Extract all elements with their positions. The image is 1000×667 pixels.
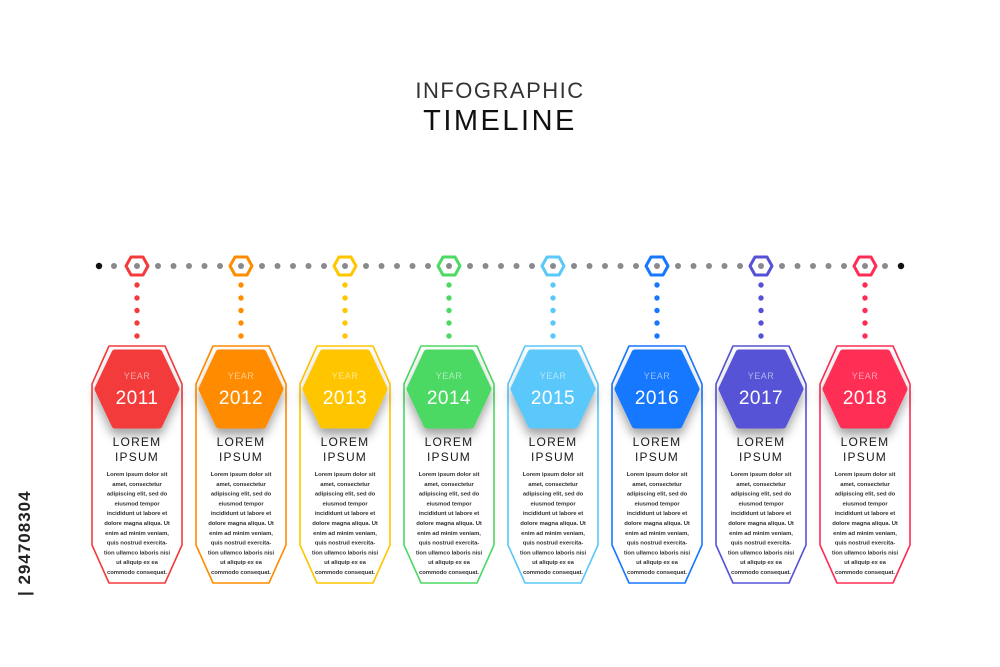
connector 2017 bbox=[758, 282, 764, 339]
title: INFOGRAPHIC bbox=[415, 78, 585, 103]
marker 2011 bbox=[126, 257, 148, 275]
timeline dotted line bbox=[96, 263, 904, 269]
card 2011 bbox=[92, 346, 182, 583]
card 2017: YEAR bbox=[748, 371, 774, 381]
card 2017: 2017 bbox=[739, 388, 783, 409]
card 2014 bbox=[404, 346, 494, 583]
card 2016: 2016 bbox=[635, 388, 679, 409]
card 2018: YEAR bbox=[852, 371, 878, 381]
connector 2016 bbox=[654, 282, 660, 339]
card 2012: 2012 bbox=[219, 388, 263, 409]
column 2015 bbox=[508, 257, 598, 583]
column 2011 bbox=[92, 257, 182, 583]
card 2016 bbox=[612, 346, 702, 583]
column 2017 bbox=[716, 257, 806, 583]
marker 2016 bbox=[646, 257, 668, 275]
side stock id text: | 294708304 bbox=[15, 490, 34, 596]
card 2015: IPSUM bbox=[531, 450, 575, 464]
card 2013: YEAR bbox=[332, 371, 358, 381]
card 2018: LOREM bbox=[841, 435, 889, 449]
connector 2013 bbox=[342, 282, 348, 339]
title bbox=[415, 78, 585, 137]
connector 2015 bbox=[550, 282, 556, 339]
card 2016: LOREM bbox=[633, 435, 681, 449]
card 2014: IPSUM bbox=[427, 450, 471, 464]
card 2017: LOREM bbox=[737, 435, 785, 449]
card 2018: IPSUM bbox=[843, 450, 887, 464]
marker 2017 bbox=[750, 257, 772, 275]
card 2018 bbox=[820, 346, 910, 583]
column 2016 bbox=[612, 257, 702, 583]
connector 2012 bbox=[238, 282, 244, 339]
card 2014: 2014 bbox=[427, 388, 471, 409]
marker 2014 bbox=[438, 257, 460, 275]
card 2015: LOREM bbox=[529, 435, 577, 449]
marker 2013 bbox=[334, 257, 356, 275]
connector 2018 bbox=[862, 282, 868, 339]
card 2015 bbox=[508, 346, 598, 583]
card 2014: YEAR bbox=[436, 371, 462, 381]
card 2013: 2013 bbox=[323, 388, 367, 409]
column 2012 bbox=[196, 257, 286, 583]
card 2012 bbox=[196, 346, 286, 583]
card 2012: LOREM bbox=[217, 435, 265, 449]
connector 2014 bbox=[446, 282, 452, 339]
column 2013 bbox=[300, 257, 390, 583]
card 2011: 2011 bbox=[116, 388, 158, 409]
card 2011: YEAR bbox=[124, 371, 150, 381]
card 2012: IPSUM bbox=[219, 450, 263, 464]
card 2013: IPSUM bbox=[323, 450, 367, 464]
card 2018: 2018 bbox=[843, 388, 887, 409]
card 2015: YEAR bbox=[540, 371, 566, 381]
marker 2018 bbox=[854, 257, 876, 275]
card 2014: LOREM bbox=[425, 435, 473, 449]
column 2014 bbox=[404, 257, 494, 583]
card 2016: IPSUM bbox=[635, 450, 679, 464]
card 2016: YEAR bbox=[644, 371, 670, 381]
marker 2012 bbox=[230, 257, 252, 275]
marker 2015 bbox=[542, 257, 564, 275]
card 2017 bbox=[716, 346, 806, 583]
card 2011: IPSUM bbox=[115, 450, 159, 464]
card 2012: YEAR bbox=[228, 371, 254, 381]
card 2011: LOREM bbox=[113, 435, 161, 449]
column 2018 bbox=[820, 257, 910, 583]
connector 2011 bbox=[134, 282, 140, 339]
title: TIMELINE bbox=[423, 105, 577, 137]
card 2015: 2015 bbox=[531, 388, 575, 409]
card 2013: LOREM bbox=[321, 435, 369, 449]
card 2013 bbox=[300, 346, 390, 583]
card 2017: IPSUM bbox=[739, 450, 783, 464]
